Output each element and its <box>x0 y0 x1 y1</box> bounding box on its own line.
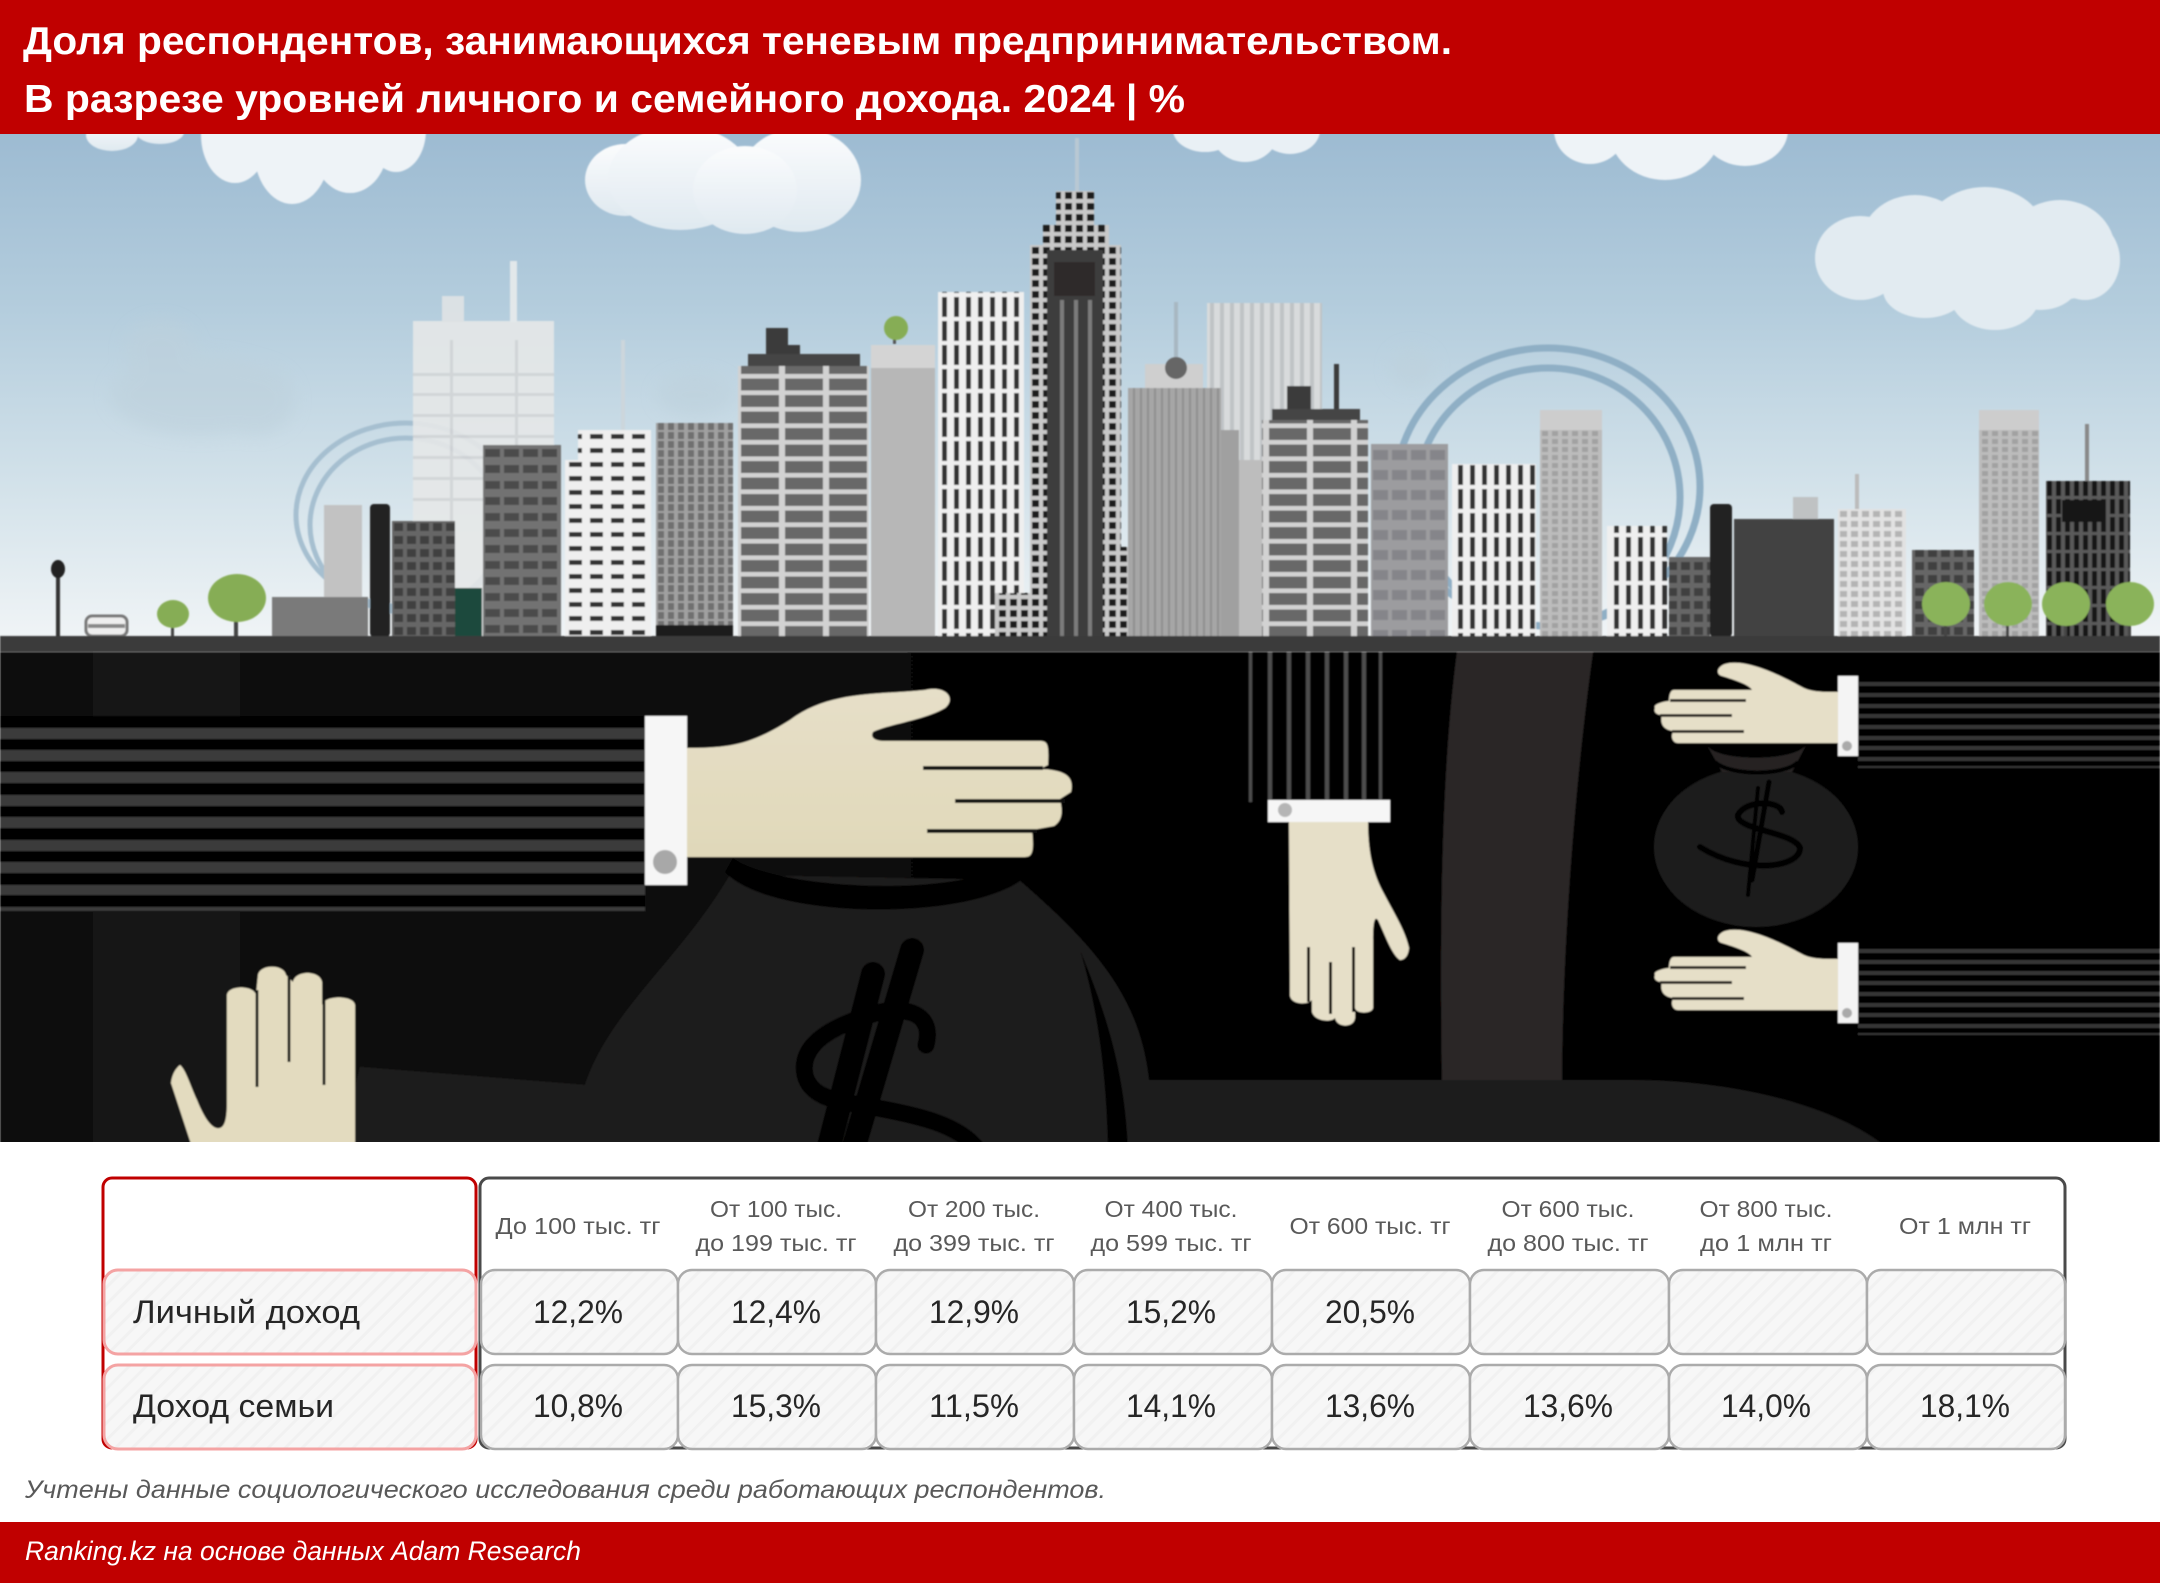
row label: personal income <box>104 1270 476 1354</box>
values: 12,9% <box>929 1294 1019 1330</box>
striped sleeve: right top <box>1858 682 2160 768</box>
dark backdrop <box>0 652 2160 1147</box>
building: grey windows <box>483 445 561 637</box>
building: green base <box>455 588 482 637</box>
hand: big left with cuff <box>645 689 1072 885</box>
column headers: От 200 тыс. <box>908 1196 1040 1222</box>
values: 13,6% <box>1523 1388 1613 1424</box>
value cells <box>481 1365 2065 1449</box>
footer band with source <box>0 1522 2160 1583</box>
column headers: От 800 тыс. <box>1700 1196 1832 1222</box>
road <box>0 636 2160 652</box>
values: 15,2% <box>1126 1294 1216 1330</box>
column headers <box>496 1196 2031 1256</box>
values: 12,4% <box>731 1294 821 1330</box>
tree: small left <box>157 600 189 638</box>
values: 18,1% <box>1920 1388 2010 1424</box>
footer band with source: Ranking.kz на основе данных Adam Research <box>25 1536 581 1566</box>
column headers: до 399 тыс. тг <box>894 1230 1054 1256</box>
building: black with spire right <box>2046 424 2130 637</box>
column headers: От 1 млн тг <box>1899 1213 2031 1239</box>
value columns frame <box>480 1178 2065 1448</box>
data table <box>103 1178 2065 1449</box>
footnote: Учтены данные социологического исследования среди работающих респондентов. <box>24 1476 1106 1504</box>
cloud: right large <box>1815 187 2120 330</box>
ferris wheel arcs: left <box>293 420 414 614</box>
row label: family income <box>104 1365 476 1449</box>
building: dark pillar left <box>370 504 390 637</box>
building: dark low <box>1669 557 1710 637</box>
building: dark windows with antenna <box>1262 364 1368 637</box>
building: light tall behind <box>1206 302 1322 460</box>
building: grey tower with clock <box>1128 302 1262 637</box>
building: black windows <box>1452 464 1536 637</box>
faint distant clouds <box>110 320 1434 435</box>
row label: personal income: Личный доход <box>133 1294 360 1330</box>
values: 13,6% <box>1325 1388 1415 1424</box>
values <box>533 1294 1415 1330</box>
values: 14,1% <box>1126 1388 1216 1424</box>
cloud: top left large <box>200 134 427 205</box>
value cells <box>481 1270 2065 1354</box>
building: low block left <box>272 597 368 637</box>
row label column frame <box>103 1178 476 1448</box>
row label: family income: Доход семьи <box>133 1388 334 1424</box>
header band with title <box>0 0 2160 134</box>
values: 11,5% <box>929 1388 1019 1424</box>
column headers: До 100 тыс. тг <box>496 1213 660 1239</box>
column headers: От 600 тыс. тг <box>1290 1213 1450 1239</box>
cloud: top left small <box>85 134 184 152</box>
column headers: до 1 млн тг <box>1700 1230 1832 1256</box>
large money bag <box>340 858 1890 1150</box>
building: white with black slits <box>938 292 1024 637</box>
values: 20,5% <box>1325 1294 1415 1330</box>
title line 1: Доля респондентов, занимающихся теневым предпринимательством. <box>23 20 1452 63</box>
illustration: underground dark section <box>0 652 2160 1150</box>
building: small far <box>324 504 362 598</box>
row: personal income <box>104 1270 2065 1354</box>
ferris wheel arcs: right <box>1396 348 1700 626</box>
building: dark block left <box>392 521 455 637</box>
striped sleeve: left <box>0 716 645 912</box>
cloud: top right <box>1554 134 1788 181</box>
street lamp <box>51 560 65 638</box>
values: 14,0% <box>1721 1388 1811 1424</box>
building: main black skyscraper <box>994 138 1128 638</box>
building: light grey tower <box>1540 410 1602 637</box>
building: big grey block with roof <box>738 328 869 637</box>
hand: lower left raised <box>171 967 355 1150</box>
cloud: top centre <box>585 126 861 234</box>
sky <box>0 134 2160 638</box>
trees: right row <box>1922 582 2154 638</box>
cloud: top middle right <box>1172 134 1320 163</box>
values: 12,2% <box>533 1294 623 1330</box>
values <box>533 1388 2010 1424</box>
striped sleeve: right bottom <box>1858 949 2160 1035</box>
title line 2: В разрезе уровней личного и семейного дохода. 2024 | % <box>24 78 1185 121</box>
hand: centre pointing down with cuff <box>1268 800 1409 1026</box>
buildings: left far tower <box>413 261 554 637</box>
small dollar sign <box>1700 782 1800 895</box>
building: mid grey <box>1371 444 1448 637</box>
column headers: до 199 тыс. тг <box>696 1230 856 1256</box>
building: dark block right <box>1734 497 1834 637</box>
bus <box>86 616 127 636</box>
building: white with black windows <box>565 430 651 637</box>
vertical sleeve: centre <box>1249 652 1382 802</box>
building: black windows small <box>1607 526 1667 637</box>
hand: right bottom with cuff <box>1655 930 1858 1023</box>
small money bag <box>1654 745 1858 927</box>
large dollar sign <box>804 950 978 1150</box>
illustration: city skyline and sky <box>0 80 2160 652</box>
figure body <box>1441 652 1593 1085</box>
values: 15,3% <box>731 1388 821 1424</box>
building: dark right <box>1912 550 1974 637</box>
column headers: От 100 тыс. <box>710 1196 842 1222</box>
values: 10,8% <box>533 1388 623 1424</box>
building: light grey tower with tree <box>871 316 935 637</box>
building: light tall right <box>1979 410 2039 637</box>
column headers: От 600 тыс. <box>1502 1196 1634 1222</box>
row: family income <box>104 1365 2065 1449</box>
tree: big left <box>208 574 266 637</box>
column headers: От 400 тыс. <box>1104 1196 1238 1222</box>
column headers: до 800 тыс. тг <box>1488 1230 1648 1256</box>
building: light right <box>1838 474 1906 637</box>
building: grey striped with spire <box>621 340 733 637</box>
column headers: до 599 тыс. тг <box>1090 1230 1252 1256</box>
hand: right top with cuff <box>1655 663 1858 756</box>
building: dark pillar right <box>1710 504 1732 637</box>
